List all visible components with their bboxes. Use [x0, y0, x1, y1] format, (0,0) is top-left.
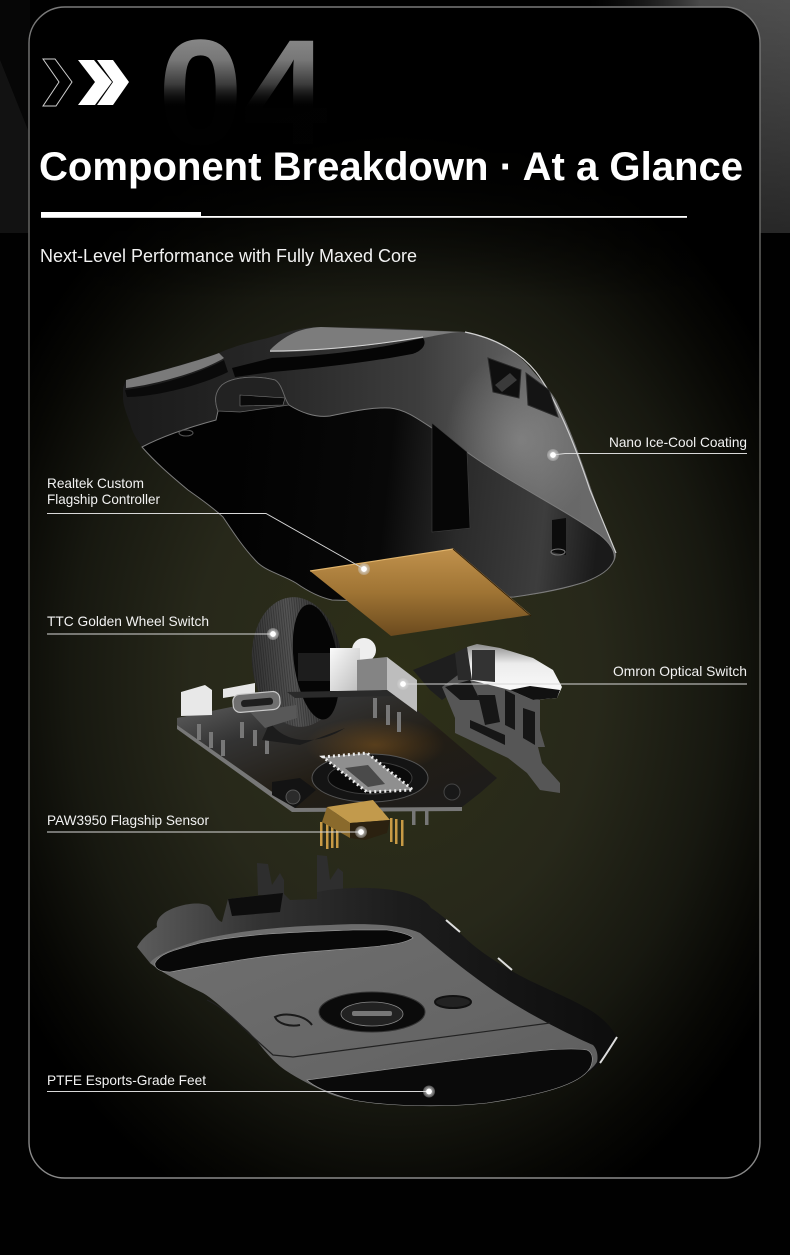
illustration: gold sensor — [320, 800, 404, 849]
white side button — [467, 644, 562, 700]
shell interior — [142, 377, 614, 602]
callout: Omron Optical Switch: Omron Optical Switch — [613, 663, 747, 679]
sensor well — [312, 754, 428, 802]
side slots — [275, 1015, 312, 1026]
hub — [298, 653, 332, 681]
board plate — [177, 690, 497, 808]
callout: PAW3950 Flagship Sensor — [47, 812, 367, 838]
illustration: side button bracket — [413, 644, 562, 793]
rear highlights — [465, 332, 616, 553]
callout: TTC Golden Wheel Switch: TTC Golden Wheel Switch — [47, 613, 209, 629]
clip tray — [228, 893, 283, 916]
callout: PTFE Esports-Grade Feet — [47, 1072, 435, 1098]
callout: Omron Optical Switch — [397, 663, 747, 690]
rear foot — [307, 1049, 592, 1106]
tire — [245, 593, 349, 731]
through-hole pins — [197, 698, 401, 756]
screw posts — [179, 430, 193, 436]
illustration: omron switch — [287, 638, 417, 712]
illustration: scroll wheel — [245, 593, 349, 745]
grey sole — [150, 924, 598, 1105]
illustration: circuit board — [177, 690, 497, 825]
title underline — [41, 212, 687, 218]
bracket dark slots — [445, 680, 535, 745]
right button — [270, 327, 465, 352]
front foot — [155, 930, 413, 972]
subtitle: Next-Level Performance with Fully Maxed Core — [40, 246, 417, 266]
illustration: usb-c port and blocks — [181, 683, 297, 728]
left button — [126, 353, 224, 388]
vents — [488, 358, 521, 398]
section number 04: 04 — [158, 8, 328, 176]
title: Component Breakdown · At a Glance — [39, 145, 743, 189]
bracket arm — [413, 653, 470, 700]
shell sheen — [460, 374, 573, 498]
callout: Nano Ice-Cool Coating: Nano Ice-Cool Coating — [609, 434, 747, 450]
base rim — [137, 888, 617, 1105]
callout: Realtek Custom Flagship Controller: Realtek Custom — [47, 475, 144, 491]
wheel opening — [286, 602, 346, 722]
callout: PAW3950 Flagship Sensor: PAW3950 Flagship Sensor — [47, 812, 209, 828]
clips — [257, 855, 343, 895]
pocket — [216, 377, 289, 412]
callout: TTC Golden Wheel Switch — [47, 613, 279, 640]
side buttons — [446, 920, 512, 970]
callout: Realtek Custom Flagship Controller — [47, 475, 370, 575]
icon: section chevrons — [43, 59, 129, 106]
callout: Nano Ice-Cool Coating — [547, 434, 747, 461]
inner dark pillars — [432, 423, 470, 532]
callout: Realtek Custom Flagship Controller: Flagship Controller — [47, 491, 160, 507]
lower wheel — [262, 722, 345, 745]
plate seam — [207, 1000, 550, 1057]
bracket frame — [442, 668, 560, 793]
illustration: top shell — [123, 327, 616, 602]
illustration: bottom case — [137, 855, 617, 1106]
shell body — [123, 327, 616, 600]
illustration: gold thermal plate — [310, 549, 531, 636]
callout: PTFE Esports-Grade Feet: PTFE Esports-Grade Feet — [47, 1072, 206, 1088]
sensor window — [319, 992, 425, 1032]
mount block — [272, 778, 316, 808]
